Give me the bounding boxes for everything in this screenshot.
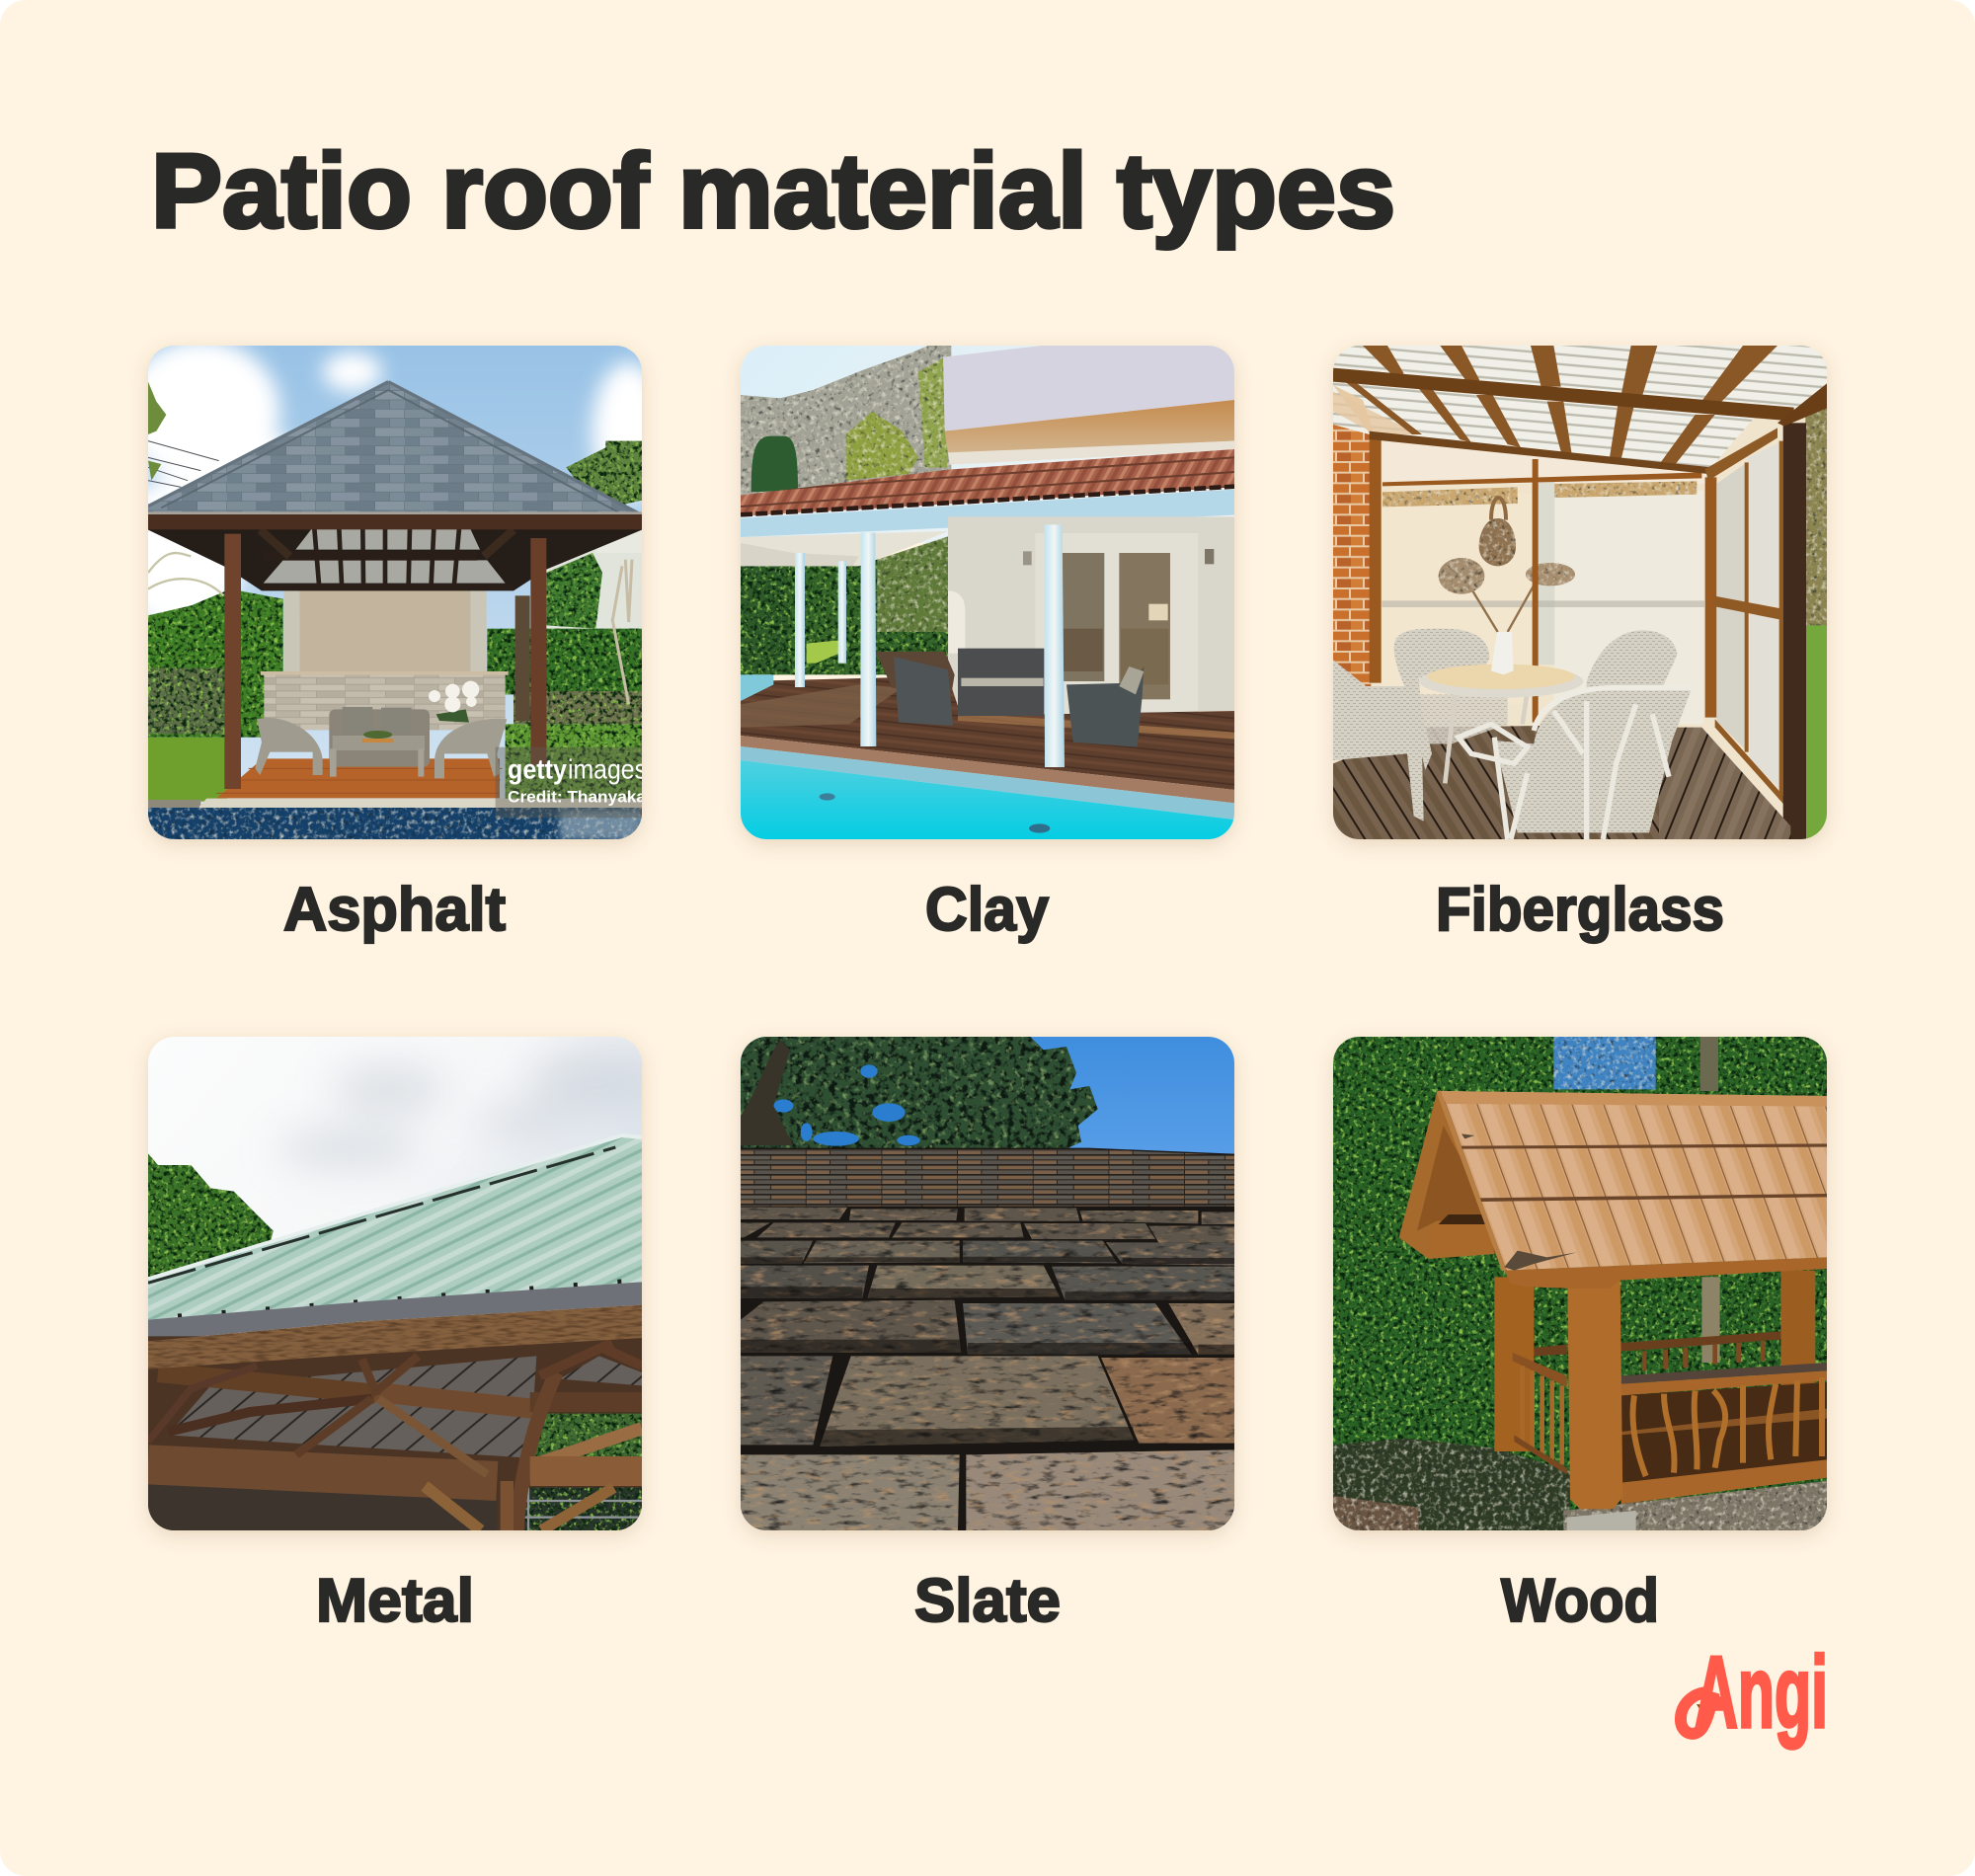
bench top and rail bbox=[1621, 1363, 1827, 1384]
grey fascia bbox=[148, 1282, 642, 1341]
underside ceiling bbox=[148, 523, 642, 590]
label: Wood: Wood bbox=[1501, 1566, 1659, 1635]
pool coping bbox=[148, 800, 200, 808]
fiberglass ceiling bbox=[1333, 372, 1794, 471]
label: Slate: Slate bbox=[914, 1566, 1061, 1635]
mountain bbox=[741, 346, 951, 497]
main beam bbox=[1333, 368, 1794, 422]
garden strip bbox=[1805, 408, 1827, 629]
metal roof panel bbox=[148, 1136, 642, 1320]
hedges and lawn bbox=[741, 560, 948, 674]
lower wall bbox=[148, 1474, 497, 1530]
covered ceiling bbox=[741, 531, 948, 566]
back wall bbox=[299, 587, 471, 673]
side railing bbox=[1513, 1353, 1567, 1474]
columns bbox=[795, 524, 1065, 767]
table bbox=[1419, 664, 1583, 783]
wall lights bbox=[1023, 551, 1032, 565]
wood underside bbox=[148, 1336, 642, 1530]
label: Asphalt: Asphalt bbox=[283, 875, 506, 944]
front chair bbox=[1459, 688, 1694, 839]
pool water bbox=[741, 760, 1234, 839]
pine tree bbox=[741, 1037, 1098, 1155]
eave trim bbox=[1504, 1257, 1827, 1289]
wood deck bbox=[741, 676, 1234, 790]
timber beams bbox=[148, 1343, 642, 1530]
tree trunk bbox=[1700, 1037, 1718, 1091]
dark lower lips of slates bbox=[741, 1257, 1234, 1446]
dark post bbox=[1783, 423, 1806, 839]
brick wall bbox=[1333, 415, 1371, 688]
photo: metal roof bbox=[148, 1037, 665, 1530]
back wicker chairs bbox=[1394, 629, 1677, 770]
patio furniture bbox=[255, 707, 507, 778]
upper storey bbox=[943, 346, 1234, 431]
outdoor furniture bbox=[876, 649, 1144, 747]
white beam bbox=[741, 490, 1234, 537]
pool edge stones bbox=[741, 736, 1234, 803]
patio door bbox=[1035, 533, 1198, 716]
label: Metal: Metal bbox=[316, 1566, 474, 1635]
pool coping band bbox=[741, 746, 1234, 820]
clouds bbox=[276, 1054, 665, 1168]
background trees and hedges bbox=[148, 382, 642, 738]
photo: asphalt shingle gazebo bbox=[148, 346, 642, 839]
back wall upper bbox=[1376, 434, 1708, 484]
posts bbox=[224, 534, 241, 789]
asphalt roof bbox=[148, 382, 642, 515]
label: Fiberglass: Fiberglass bbox=[1436, 875, 1724, 944]
deck floor bbox=[1333, 724, 1666, 839]
wood shingle roof bbox=[1439, 1091, 1827, 1271]
curtains bbox=[1382, 481, 1704, 724]
lower rail bbox=[1621, 1459, 1827, 1504]
rear post bbox=[1494, 1277, 1534, 1451]
photo: fiberglass pergola bbox=[1333, 346, 1827, 839]
clay tile roof bbox=[741, 449, 1234, 516]
left chair bbox=[1333, 660, 1424, 821]
far slate rows bbox=[741, 1149, 1234, 1207]
trees bbox=[846, 412, 918, 481]
clouds bbox=[148, 346, 642, 616]
watermark: Credit: Thanyaka bbox=[508, 788, 647, 807]
stone wall bbox=[264, 674, 506, 730]
slate base bbox=[741, 1148, 1234, 1530]
ground bbox=[1333, 1439, 1570, 1533]
label: Clay: Clay bbox=[925, 875, 1049, 944]
logo: Angi: Angi bbox=[1695, 1635, 1828, 1749]
twig balusters bbox=[1632, 1377, 1822, 1476]
title: Patio roof material types bbox=[151, 131, 1395, 250]
slate tiles bbox=[741, 1208, 1234, 1530]
watermark: getty bbox=[508, 754, 568, 785]
dried stems bbox=[1439, 558, 1575, 632]
wood deck bbox=[216, 758, 500, 798]
opening with foliage bbox=[533, 1414, 642, 1456]
wooden rafters bbox=[1343, 346, 1778, 464]
logo: Angi bbox=[1681, 1635, 1828, 1749]
rear beam bbox=[1370, 431, 1711, 474]
fascia bbox=[148, 511, 642, 514]
basket lantern bbox=[1479, 498, 1516, 566]
lawn bbox=[148, 738, 227, 802]
vase bbox=[1491, 632, 1514, 674]
photo: clay tile patio bbox=[741, 346, 1234, 839]
house wall bbox=[948, 516, 1234, 711]
soffit panel bbox=[168, 1356, 536, 1458]
front post bbox=[1567, 1281, 1622, 1509]
main timber fascia beam bbox=[148, 1305, 642, 1369]
watermark: images bbox=[568, 754, 647, 785]
tree bbox=[148, 1153, 274, 1284]
sky gap bbox=[1553, 1037, 1656, 1089]
orchids bbox=[429, 681, 479, 723]
bench interior bbox=[1621, 1382, 1827, 1483]
timber frame bbox=[1370, 432, 1716, 723]
photo: wood gazebo bbox=[1333, 1037, 1827, 1533]
gable end bbox=[1399, 1093, 1494, 1259]
pool water bbox=[148, 808, 642, 839]
back rail bbox=[1621, 1331, 1780, 1370]
window panels bbox=[1713, 441, 1784, 805]
photo: slate roof bbox=[741, 1037, 1234, 1530]
card shadows bbox=[148, 346, 1827, 1530]
watermark bbox=[496, 747, 647, 818]
